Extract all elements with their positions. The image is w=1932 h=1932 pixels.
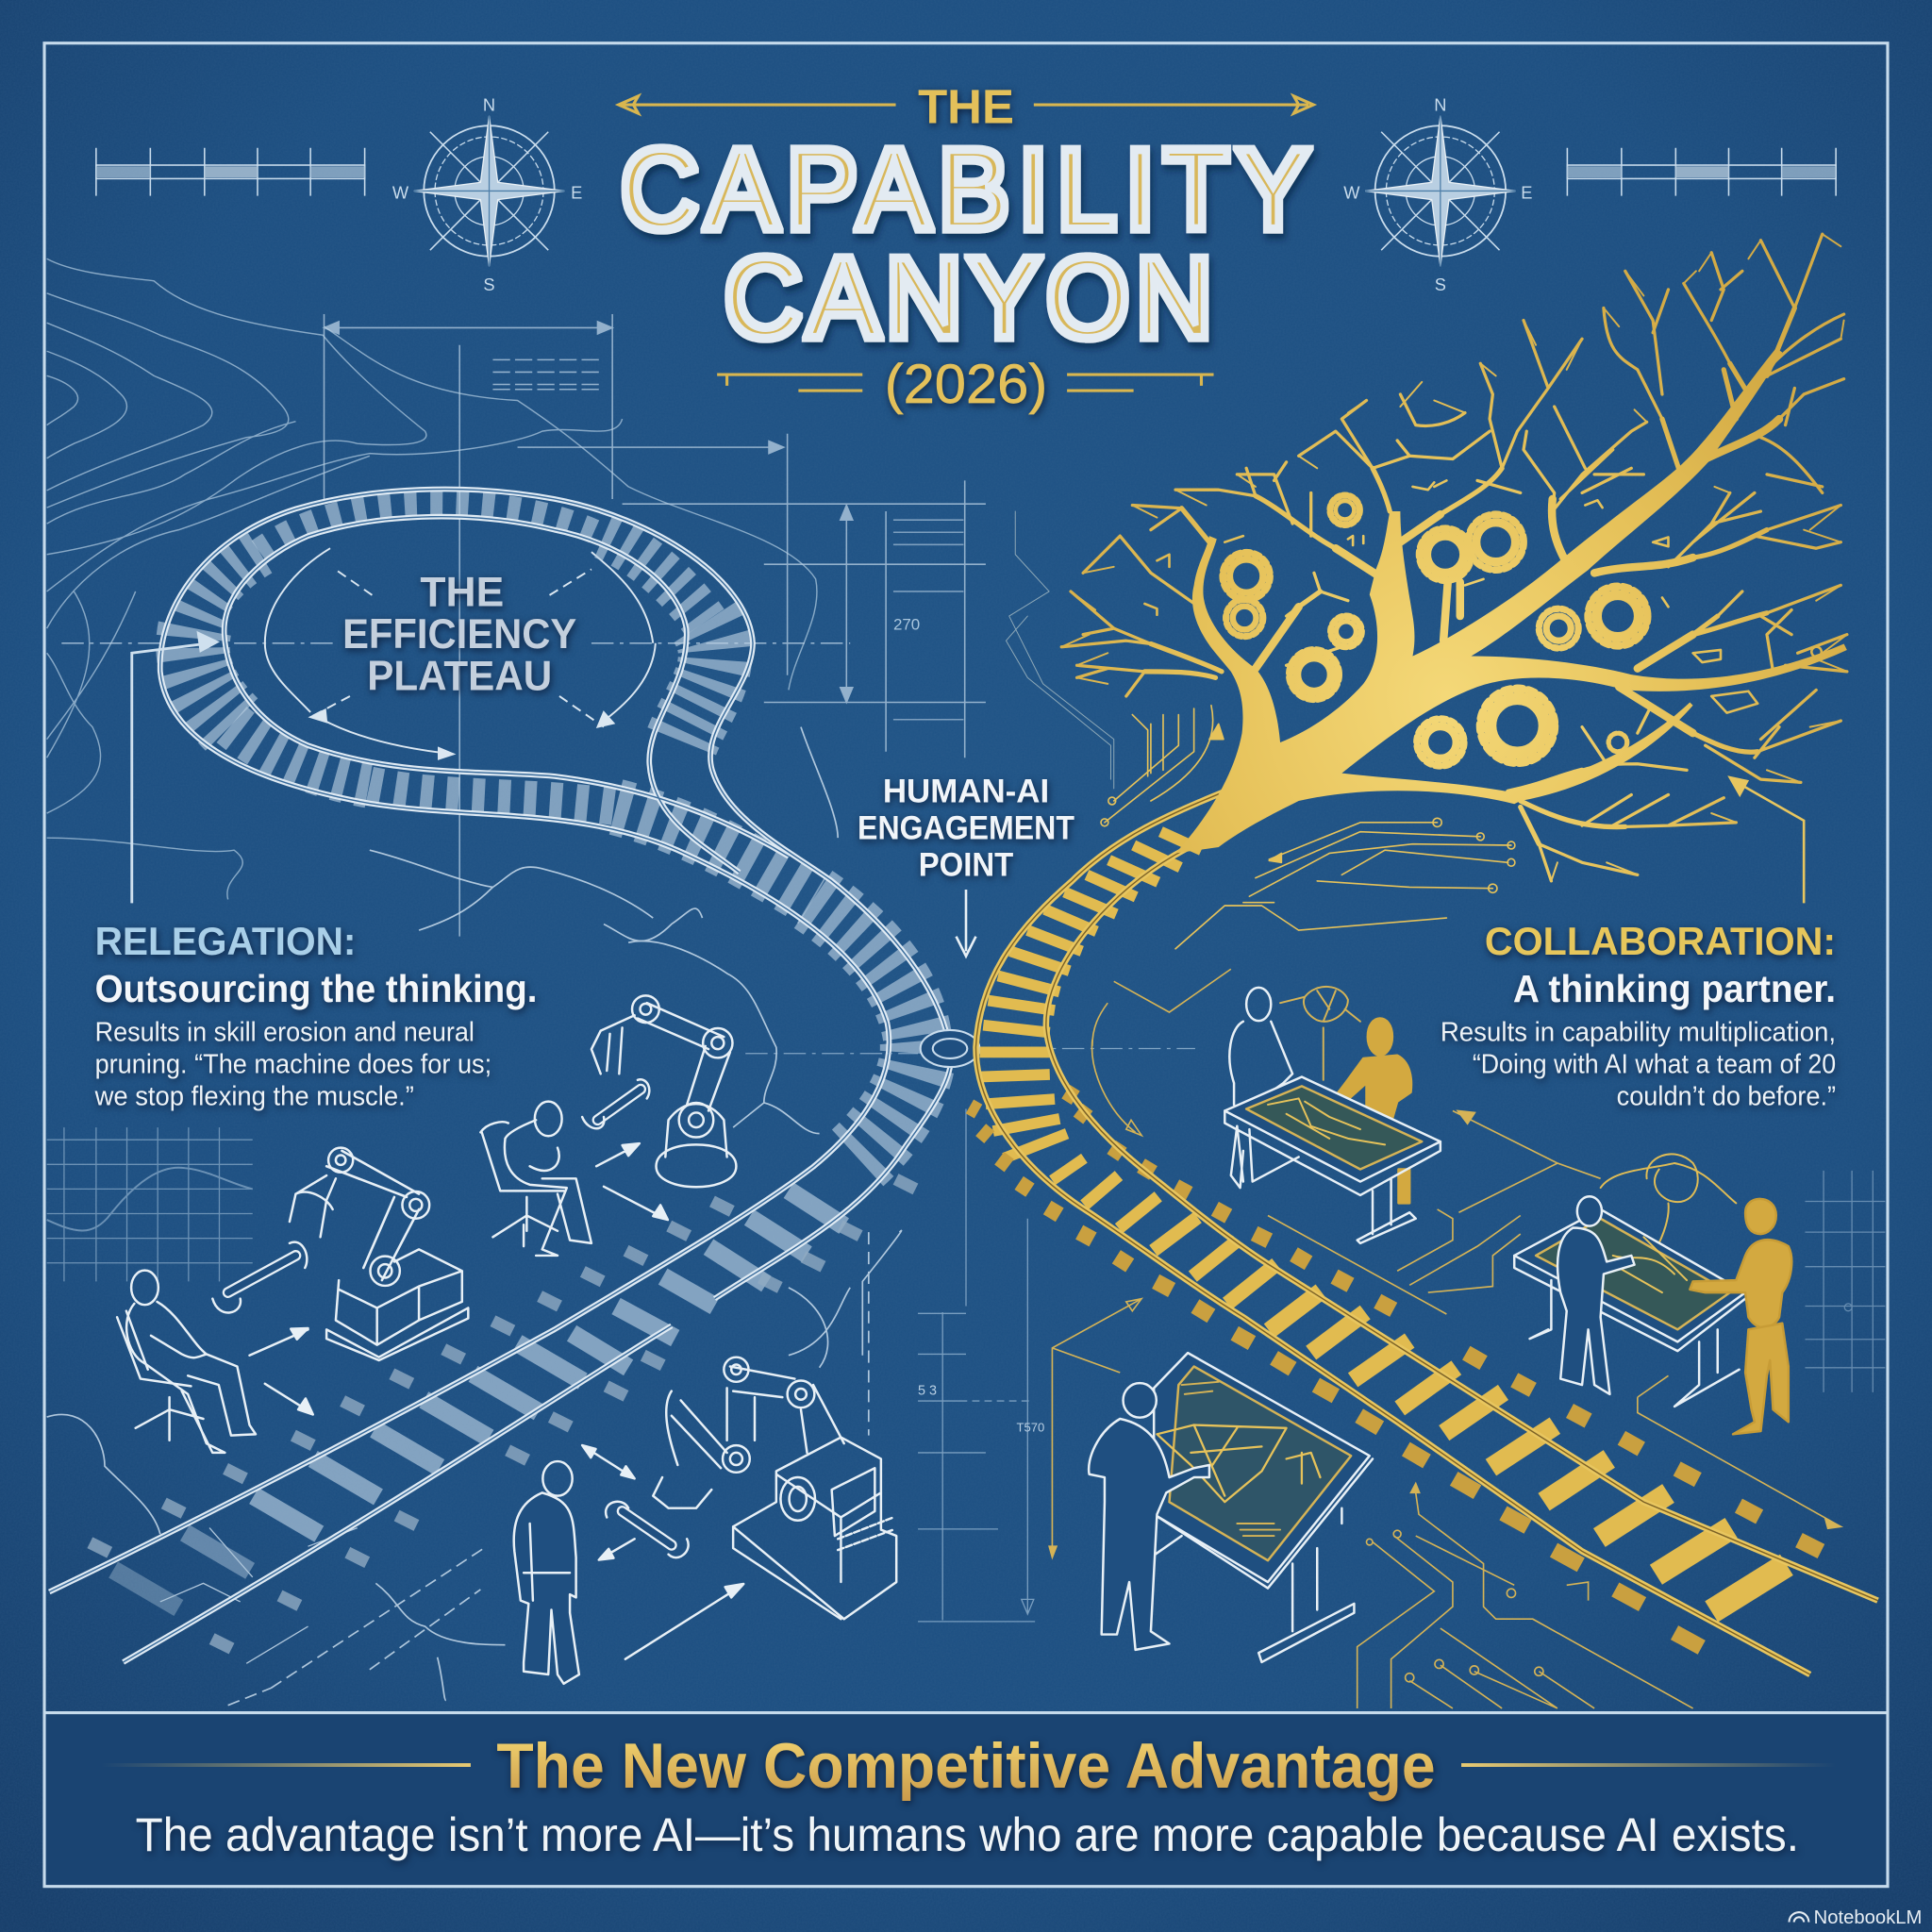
- engagement arrow: [957, 890, 975, 957]
- text block: relegation: pruning. “The machine does for us;: [95, 1050, 491, 1080]
- title word THE: THE: [918, 80, 1014, 134]
- compass left: [392, 95, 582, 294]
- scale bar right: [1567, 148, 1836, 196]
- loop sleepers: [192, 503, 918, 1164]
- table one: [1224, 1077, 1441, 1243]
- text block: relegation: we stop flexing the muscle.”: [94, 1082, 414, 1112]
- circuit traces near trunk: [1006, 511, 1515, 949]
- lower track sleepers: [113, 1191, 844, 1607]
- gold sleepers: [1052, 1158, 1787, 1611]
- label: human-ai engagement point: ENGAGEMENT: [858, 809, 1074, 846]
- gold robot two: [1690, 1199, 1791, 1434]
- dimension label 270: 270: [893, 615, 920, 633]
- standing person: [514, 1461, 579, 1684]
- circuit brain sketch: [1280, 987, 1360, 1080]
- right figures and robots: [1089, 987, 1791, 1662]
- gold circuit traces, lower right: [1049, 969, 1840, 1708]
- trunk and main limbs: [1175, 348, 1847, 853]
- dimension lines: [61, 314, 986, 937]
- right railway: gold track: [970, 789, 1878, 1674]
- seated person with chair: [117, 1271, 256, 1453]
- robot arm one: [290, 1148, 468, 1360]
- thick branches: [1256, 419, 1779, 733]
- left railway: broken track and plateau loop: [49, 490, 951, 1662]
- label: the efficiency plateau: [342, 570, 576, 699]
- title year: (2026): [885, 354, 1047, 415]
- text block: relegation: [94, 919, 537, 1112]
- small graph grid, lower right: [1805, 1171, 1885, 1392]
- human at table two: [1557, 1196, 1635, 1394]
- bottom heading rule right: [1461, 1763, 1836, 1767]
- wrench two: [582, 1079, 649, 1128]
- drafting table: [1151, 1353, 1373, 1662]
- label: human-ai engagement point: POINT: [919, 847, 1014, 884]
- smallest twig tips: [1061, 234, 1847, 881]
- text block: collaboration: [1441, 919, 1836, 1112]
- gold robot one: [1329, 1019, 1411, 1203]
- compass left: E: [571, 182, 582, 202]
- label: the efficiency plateau: PLATEAU: [367, 653, 552, 699]
- year ornaments: [717, 375, 1214, 391]
- collaboration leader arrow: [1730, 777, 1804, 903]
- text block: collaboration: couldn’t do before.”: [1617, 1082, 1836, 1112]
- bottom statement: The advantage isn’t more AI—it’s humans who are more capable because AI exists.: [136, 1808, 1799, 1861]
- label: human-ai engagement point: [858, 773, 1074, 884]
- scale bar left: [96, 148, 365, 196]
- compass right: E: [1521, 182, 1532, 202]
- compass left: S: [483, 275, 495, 294]
- compass right: N: [1434, 95, 1446, 115]
- small graph grid, lower left: [47, 1127, 253, 1281]
- title block: [619, 80, 1313, 415]
- cracks in the ground: [47, 727, 902, 1706]
- engagement junction: [745, 1030, 1195, 1067]
- medium branches: [1144, 308, 1794, 844]
- label: human-ai engagement point: HUMAN-AI: [883, 773, 1049, 809]
- text block: collaboration: COLLABORATION:: [1485, 919, 1836, 963]
- measure label 53: 5 3: [918, 1384, 937, 1399]
- golden neural tree with gears: [1006, 234, 1847, 949]
- compass right: [1343, 95, 1532, 294]
- fine twig branches: [1061, 234, 1847, 881]
- measure label T: T570: [1017, 1421, 1044, 1435]
- lower track end tabs: [90, 1179, 915, 1649]
- robot arm three: [653, 1357, 896, 1619]
- compass left: W: [392, 182, 409, 202]
- compass right: S: [1435, 275, 1446, 294]
- rails: [49, 490, 951, 1662]
- text block: relegation: Results in skill erosion and neural: [95, 1018, 475, 1048]
- text block: relegation: Outsourcing the thinking.: [95, 967, 537, 1010]
- label: the efficiency plateau: EFFICIENCY: [342, 611, 576, 658]
- gold wire loops: [1601, 1154, 1736, 1280]
- text block: collaboration: A thinking partner.: [1513, 967, 1836, 1010]
- human at drafting table: [1089, 1383, 1209, 1650]
- stressed seated person: [480, 1102, 591, 1256]
- text block: relegation: RELEGATION:: [95, 919, 356, 963]
- gold rails: [975, 789, 1878, 1674]
- central measure lines: [918, 1109, 1035, 1622]
- small tree glyphs: [1144, 480, 1822, 713]
- wrench three: [606, 1502, 689, 1557]
- rail groove highlight: [49, 490, 951, 1662]
- text block: collaboration: “Doing with AI what a team of 20: [1473, 1050, 1836, 1080]
- gears: [1223, 495, 1647, 766]
- table two: [1514, 1209, 1745, 1407]
- title word CAPABILITY: CAPABILITY: [621, 126, 1308, 252]
- loop guide arrows: [265, 548, 656, 759]
- bottom heading: The New Competitive Advantage: [496, 1731, 1436, 1802]
- compass right: W: [1343, 182, 1360, 202]
- left figures and robots: [117, 995, 896, 1684]
- arrows: [249, 1143, 743, 1659]
- title ornament arrows top: [619, 96, 1313, 113]
- compass left: N: [483, 95, 495, 115]
- title word CANYON: CANYON: [724, 235, 1212, 360]
- gold sleeper tabs: [970, 1091, 1821, 1647]
- bottom heading rule left: [101, 1763, 471, 1767]
- human at table one: [1229, 988, 1292, 1188]
- notebooklm watermark: NotebookLM: [1814, 1907, 1922, 1928]
- label: the efficiency plateau: THE: [420, 570, 504, 616]
- relegation leader arrow: [132, 633, 217, 903]
- robot arm two: [591, 995, 736, 1187]
- text block: collaboration: Results in capability multiplication,: [1441, 1018, 1836, 1048]
- wrench one: [212, 1242, 307, 1312]
- topographic contour lines: [47, 258, 817, 899]
